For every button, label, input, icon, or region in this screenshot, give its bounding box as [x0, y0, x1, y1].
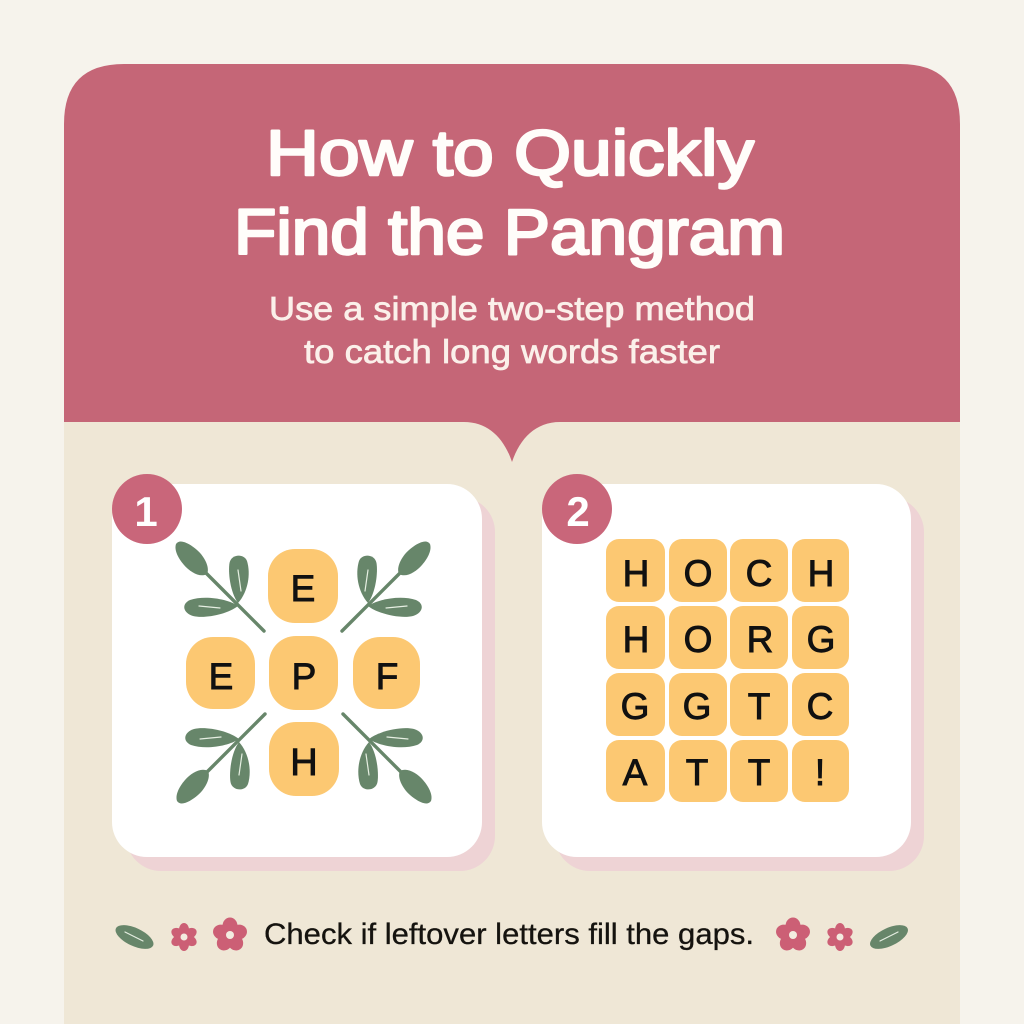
letter grid: step 2: G [683, 686, 711, 727]
icon: small flower left [169, 923, 199, 951]
header banner with pointer [64, 64, 960, 462]
panel: step 2 card [542, 474, 924, 871]
icon: right leaf [867, 920, 911, 954]
letter grid: step 2: R [747, 619, 773, 660]
letter grid: step 2: T [686, 752, 708, 793]
icon: bottom-right sprig [343, 714, 432, 803]
icon: left leaf [112, 920, 157, 954]
icon: large flower left [211, 918, 249, 954]
letter tiles: step 1: F [376, 656, 398, 697]
icon: small flower right [825, 923, 855, 951]
letter grid: step 2: T [748, 686, 770, 727]
letter grid: step 2: G [621, 686, 649, 727]
panel: step 1 card [112, 474, 495, 871]
letter tiles: step 1: H [290, 742, 318, 784]
letter grid: step 2: ! [815, 752, 825, 793]
letter grid: step 2: A [623, 752, 648, 793]
letter tiles: step 1 [186, 549, 420, 796]
subtitle [269, 290, 755, 370]
badge: step 1 [112, 474, 182, 544]
icon: large flower right [774, 918, 812, 954]
title: Find the Pangram [234, 196, 785, 268]
letter grid: step 2: G [807, 619, 835, 660]
letter grid: step 2: O [684, 619, 712, 660]
letter grid: step 2: O [684, 553, 712, 594]
title: How to Quickly [266, 117, 754, 189]
letter tiles: step 1: E [291, 568, 315, 609]
letter grid: step 2: H [623, 619, 649, 660]
icon: top-left sprig [175, 542, 264, 631]
lower beige panel [64, 400, 960, 1024]
letter grid: step 2: H [623, 553, 649, 594]
icon: top-right sprig [342, 542, 431, 631]
subtitle: to catch long words faster [304, 333, 720, 370]
title [234, 117, 785, 268]
badge: step 2: 2 [566, 488, 590, 535]
badge: step 2 [542, 474, 612, 544]
letter grid: step 2: T [748, 752, 770, 793]
badge: step 1: 1 [134, 488, 158, 535]
letter tiles: step 1: P [292, 656, 316, 697]
letter grid: step 2: C [807, 686, 833, 727]
subtitle: Use a simple two-step method [269, 290, 755, 327]
icon: bottom-left sprig [176, 714, 265, 803]
letter grid: step 2 [606, 539, 849, 802]
letter tiles: step 1: E [209, 656, 233, 697]
letter grid: step 2: H [808, 553, 834, 594]
letter grid: step 2: C [746, 553, 772, 594]
footer text: Check if leftover letters fill the gaps. [264, 918, 754, 951]
